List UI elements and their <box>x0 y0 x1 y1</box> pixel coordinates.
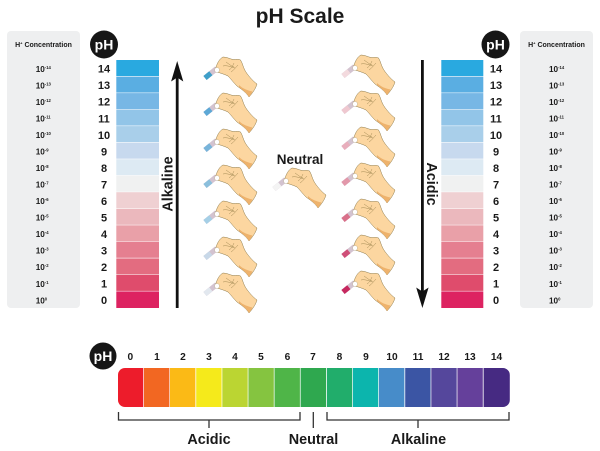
bracket: neutral <box>312 412 314 428</box>
heading: left H+ concentration: + <box>20 40 23 46</box>
concentration values left: 10 <box>36 263 45 272</box>
badge: bottom pH <box>90 342 116 370</box>
concentration values right: 10 <box>549 148 558 157</box>
scale numbers left: 0 <box>101 295 107 307</box>
label: Alkaline: Alkaline <box>160 156 176 212</box>
concentration values left: -2 <box>45 263 49 268</box>
heading: left H+ concentration: H <box>15 42 20 49</box>
hands with strips: right column <box>341 55 395 311</box>
label: Acidic: Acidic <box>423 162 439 206</box>
concentration values left: 10 <box>36 296 45 305</box>
concentration values right: 10 <box>549 214 558 223</box>
heading: left H+ concentration: Concentration <box>23 42 72 49</box>
scale numbers left: 5 <box>101 212 107 224</box>
label: bottom Neutral: Neutral <box>289 432 338 448</box>
concentration values right: -11 <box>558 115 565 120</box>
concentration values left: 0 <box>45 296 48 301</box>
scale numbers left: 4 <box>101 229 108 241</box>
concentration values left: 10 <box>36 181 45 190</box>
concentration values right: 10 <box>549 82 558 90</box>
scale numbers left: 9 <box>101 146 107 158</box>
concentration values left: -6 <box>45 197 49 202</box>
scale numbers left: 6 <box>101 196 107 208</box>
scale numbers right: 5 <box>493 212 499 224</box>
concentration values right <box>549 65 565 305</box>
concentration values right: 10 <box>549 65 558 74</box>
concentration values left: -4 <box>45 230 49 235</box>
concentration values right: 0 <box>558 296 561 301</box>
concentration values left: 10 <box>36 148 45 157</box>
bottom colour bar <box>118 368 510 407</box>
concentration values left: 10 <box>36 115 45 124</box>
concentration values right: 10 <box>549 98 558 107</box>
scale numbers right: 7 <box>493 179 499 191</box>
concentration values right: -5 <box>558 214 563 219</box>
concentration values right: -3 <box>558 247 563 252</box>
concentration values right: -1 <box>558 280 563 285</box>
scale numbers left: 3 <box>101 245 107 257</box>
concentration values left: -13 <box>45 82 52 86</box>
scale numbers right: 10 <box>490 130 502 142</box>
bottom scale numbers: 4 <box>232 352 238 363</box>
scale numbers right: 12 <box>490 97 502 109</box>
concentration values right: -14 <box>558 65 565 70</box>
concentration values left: -14 <box>45 65 52 70</box>
scale numbers right: 0 <box>493 295 499 307</box>
scale numbers left: 7 <box>101 179 107 191</box>
scale numbers right: 13 <box>490 80 502 92</box>
scale numbers right: 4 <box>493 229 500 241</box>
bottom scale numbers: 3 <box>206 352 212 363</box>
title: pH Scale <box>256 5 344 28</box>
scale numbers left: 8 <box>101 163 107 175</box>
concentration values right: 10 <box>549 181 558 190</box>
bottom scale numbers: 2 <box>180 352 186 363</box>
concentration values right: -2 <box>558 263 563 268</box>
concentration values left: -12 <box>45 98 52 103</box>
arrow: acidic down <box>416 60 429 308</box>
bottom scale numbers: 14 <box>491 352 502 363</box>
scale numbers right: 11 <box>490 113 502 125</box>
panel: right H+ concentration <box>520 31 593 308</box>
scale numbers right <box>490 64 503 307</box>
concentration values right: 10 <box>549 247 558 256</box>
scale numbers right: 2 <box>493 262 499 274</box>
arrow: alkaline up <box>171 61 183 308</box>
concentration values right: 10 <box>549 115 558 124</box>
concentration values left: -8 <box>45 164 49 169</box>
scale numbers right: 9 <box>493 146 499 158</box>
concentration values left: -1 <box>45 280 49 285</box>
bottom scale numbers: 0 <box>127 352 133 363</box>
badge: bottom pH: pH <box>94 348 112 364</box>
heading: right H+ concentration: + <box>533 40 536 46</box>
concentration values left: 10 <box>36 82 45 90</box>
scale numbers left: 10 <box>98 130 110 142</box>
panel: left H+ concentration <box>7 31 80 308</box>
concentration values right: -8 <box>558 164 563 169</box>
concentration values left: -10 <box>45 131 52 136</box>
scale numbers left: 12 <box>98 97 110 109</box>
scale numbers right: 6 <box>493 196 499 208</box>
concentration values right: 10 <box>549 230 558 239</box>
concentration values right: 10 <box>549 164 558 173</box>
bottom scale numbers: 7 <box>310 352 316 363</box>
scale numbers left: 11 <box>98 113 110 125</box>
concentration values right: -6 <box>558 197 563 202</box>
concentration values left: 10 <box>36 214 45 223</box>
badge: right pH: pH <box>486 36 505 52</box>
label: Neutral centre: Neutral <box>277 152 323 167</box>
concentration values right: -13 <box>558 82 565 86</box>
bottom scale numbers: 5 <box>258 352 264 363</box>
concentration values left: 10 <box>36 247 45 256</box>
concentration values right: 10 <box>549 296 558 305</box>
scale numbers left <box>98 64 111 307</box>
colour column left <box>116 60 159 308</box>
scale numbers left: 14 <box>98 64 111 76</box>
bottom scale numbers: 1 <box>154 352 160 363</box>
concentration values left: -7 <box>45 181 49 186</box>
bottom scale numbers: 12 <box>438 352 450 363</box>
bottom scale numbers: 6 <box>285 352 291 363</box>
label: bottom Alkaline: Alkaline <box>391 432 446 448</box>
concentration values right: -10 <box>558 131 565 136</box>
scale numbers right: 14 <box>490 64 503 76</box>
bottom scale numbers: 13 <box>464 352 476 363</box>
concentration values right: 10 <box>549 131 558 140</box>
concentration values left <box>36 65 52 305</box>
badge: left pH <box>90 30 118 58</box>
bracket: alkaline <box>327 412 509 428</box>
badge: right pH <box>482 30 510 58</box>
scale numbers right: 8 <box>493 163 499 175</box>
hands with strips: left column <box>203 57 257 313</box>
concentration values left: 10 <box>36 280 45 289</box>
concentration values left: 10 <box>36 164 45 173</box>
scale numbers right: 3 <box>493 245 499 257</box>
badge: left pH: pH <box>95 36 113 52</box>
bottom scale numbers: 9 <box>363 352 369 363</box>
scale numbers left: 1 <box>101 278 107 290</box>
concentration values right: -4 <box>558 230 563 235</box>
scale numbers left: 2 <box>101 262 107 274</box>
concentration values left: -11 <box>45 115 51 120</box>
heading: right H+ concentration: H <box>528 42 533 49</box>
concentration values left: 10 <box>36 230 45 239</box>
label: bottom Acidic: Acidic <box>187 432 231 448</box>
concentration values right: -9 <box>558 148 563 153</box>
scale numbers right: 1 <box>493 278 499 290</box>
concentration values left: 10 <box>36 131 45 140</box>
scale numbers left: 13 <box>98 80 110 92</box>
concentration values left: -5 <box>45 214 49 219</box>
concentration values right: -12 <box>558 98 565 103</box>
concentration values right: 10 <box>549 263 558 272</box>
concentration values left: 10 <box>36 65 45 74</box>
bottom scale numbers: 11 <box>413 352 424 363</box>
bottom scale numbers: 8 <box>337 352 343 363</box>
concentration values right: 10 <box>549 197 558 206</box>
concentration values left: -9 <box>45 148 49 153</box>
concentration values left: -3 <box>45 247 49 252</box>
bracket: acidic <box>118 412 300 428</box>
concentration values right: 10 <box>549 280 558 289</box>
concentration values right: -7 <box>558 181 563 186</box>
hand: neutral strip <box>272 168 326 208</box>
bottom scale numbers: 10 <box>386 352 398 363</box>
heading: right H+ concentration: Concentration <box>536 42 585 49</box>
colour column right <box>441 60 483 308</box>
concentration values left: 10 <box>36 98 45 107</box>
concentration values left: 10 <box>36 197 45 206</box>
bottom scale numbers <box>127 352 502 363</box>
